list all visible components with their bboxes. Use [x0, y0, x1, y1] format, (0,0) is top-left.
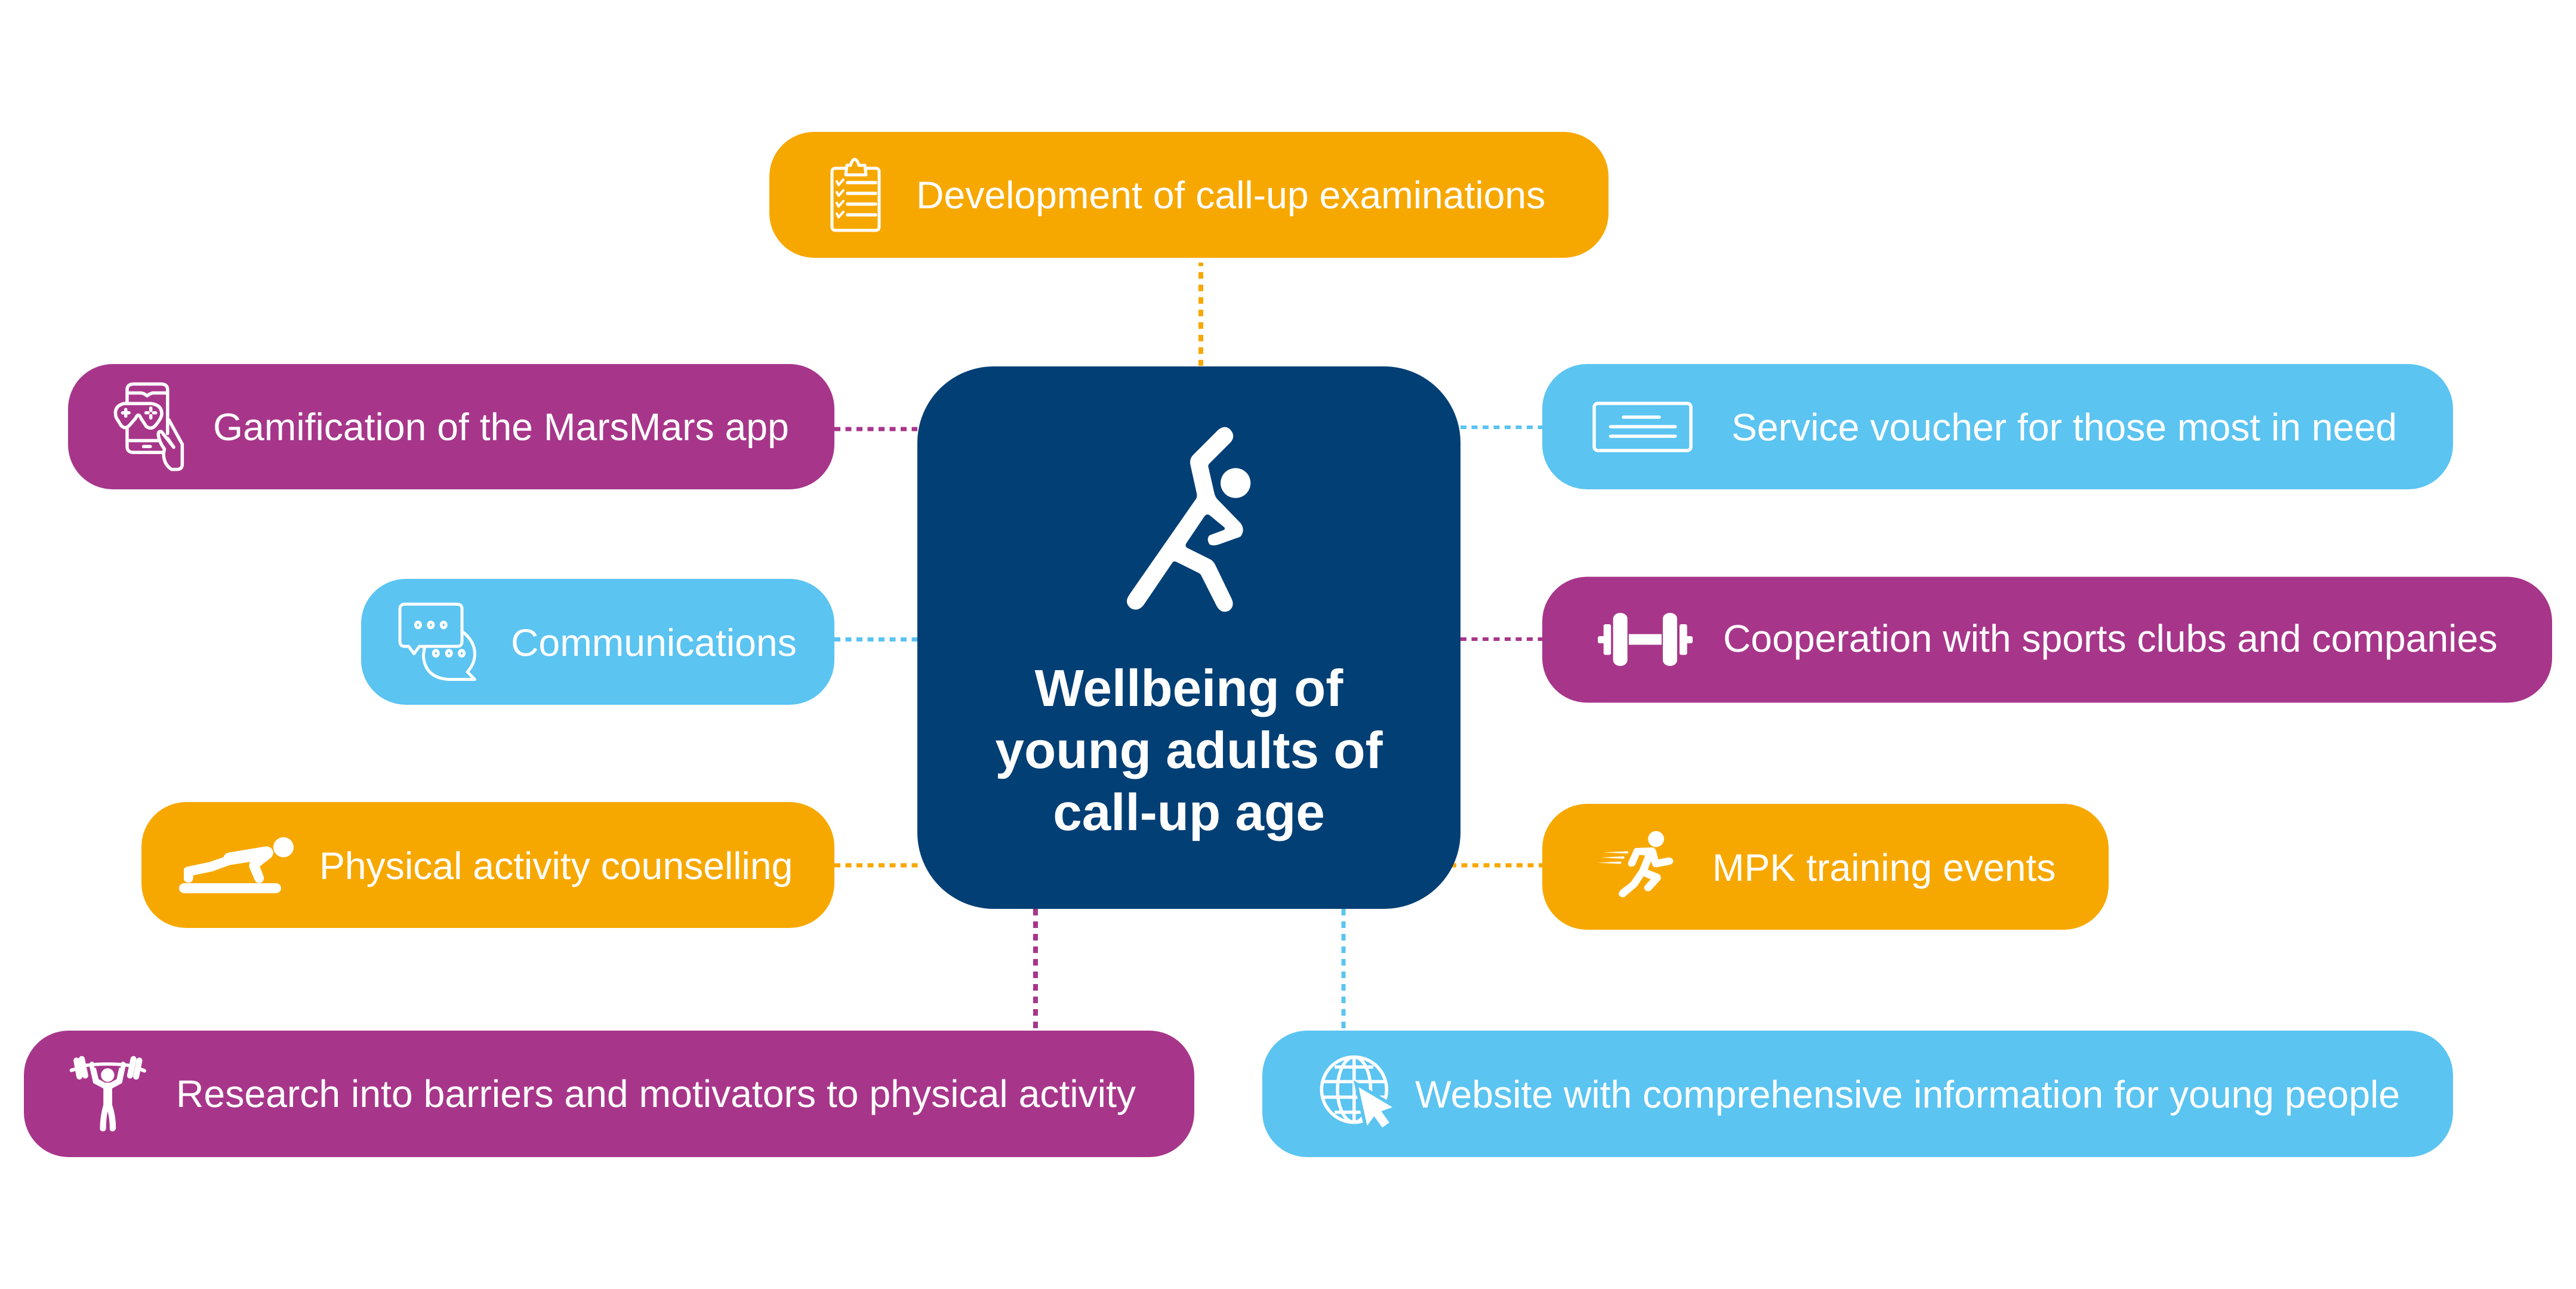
heading: centre title: call-up age	[1053, 784, 1325, 841]
icon: clipboard checklist	[832, 159, 879, 230]
text: cooperation label: Cooperation with sports clubs and companies	[1723, 617, 2497, 660]
panel: communications	[361, 579, 834, 705]
text: communications label: Communications	[511, 621, 797, 664]
icon: person doing plank	[179, 837, 294, 893]
connector: cooperation to centre	[1460, 637, 1542, 641]
connector: communications to centre	[834, 637, 917, 642]
panel: physical activity counselling	[141, 802, 834, 928]
icon: weightlifter	[72, 1059, 144, 1131]
icon: runner	[1597, 831, 1674, 897]
panel: development of call-up examinations	[769, 132, 1609, 258]
connector: top to centre	[1198, 263, 1203, 366]
icon: globe with cursor	[1321, 1057, 1392, 1127]
connector: research to centre	[1033, 909, 1038, 1031]
heading: centre title: Wellbeing of	[1035, 659, 1344, 717]
text: counselling label: Physical activity counselling	[319, 844, 793, 887]
text: research label: Research into barriers and motivators to physical activity	[176, 1072, 1136, 1115]
panel: cooperation with sports clubs	[1542, 576, 2552, 703]
panel: MPK training events	[1542, 804, 2109, 930]
panel: website	[1262, 1031, 2453, 1157]
connector: website to centre	[1342, 909, 1345, 1031]
panel: service voucher	[1542, 364, 2453, 489]
connector: MPK to centre	[1450, 863, 1542, 868]
text: voucher label: Service voucher for those most in need	[1731, 406, 2397, 449]
text: development label: Development of call-up examinations	[916, 174, 1545, 217]
heading: centre title: young adults of	[995, 721, 1383, 779]
text: website label: Website with comprehensive information for young people	[1415, 1073, 2400, 1116]
icon: voucher card	[1594, 403, 1691, 451]
icon: speech bubbles	[400, 604, 475, 680]
connector: gamification to centre	[834, 427, 917, 431]
panel: research into barriers and motivators	[24, 1031, 1194, 1157]
connector: service voucher to centre	[1460, 425, 1542, 429]
icon: dumbbell	[1598, 613, 1693, 666]
text: MPK label: MPK training events	[1712, 846, 2056, 889]
text: gamification label: Gamification of the MarsMars app	[213, 406, 789, 449]
connector: physical activity counselling to centre	[834, 863, 922, 868]
icon: phone with game controller and hand	[115, 384, 182, 470]
panel: centre box	[917, 366, 1460, 909]
panel: gamification of the MarsMars app	[68, 364, 834, 489]
icon: stretching figure	[1127, 427, 1250, 612]
